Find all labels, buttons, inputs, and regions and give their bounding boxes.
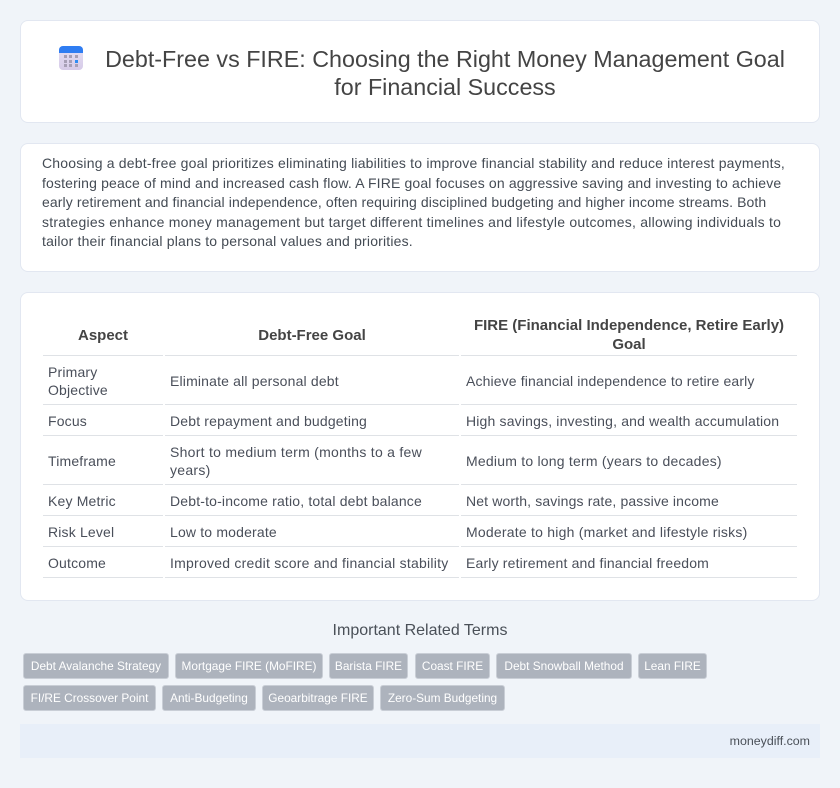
tag: Coast FIRE — [422, 659, 483, 673]
column header: FIRE goal: Goal — [612, 336, 646, 353]
row: Primary Objective — [48, 364, 108, 398]
cell: debt timeframe: years) — [170, 462, 211, 478]
row: Outcome: Outcome — [48, 555, 106, 571]
column header: Aspect: Aspect — [78, 327, 128, 344]
tag: Zero-Sum Budgeting — [388, 691, 497, 705]
related terms heading: Important Related Terms — [333, 622, 507, 639]
tag — [162, 685, 256, 711]
cell: FIRE outcome: Early retirement and financial freedom — [466, 555, 709, 571]
cell: debt outcome: Improved credit score and financial stability — [170, 555, 448, 571]
row: Focus: Focus — [48, 413, 87, 429]
title: for Financial Success — [334, 74, 556, 100]
related terms tags — [23, 653, 707, 711]
cell: debt metric: Debt-to-income ratio, total debt balance — [170, 493, 422, 509]
cell: FIRE timeframe: Medium to long term (years to decades) — [466, 453, 722, 469]
tag — [415, 653, 490, 679]
row: Risk Level: Risk Level — [48, 524, 114, 540]
tag: Barista FIRE — [335, 659, 402, 673]
cell: debt timeframe: Short to medium term (months to a few — [170, 444, 422, 460]
row: Key Metric: Key Metric — [48, 493, 116, 509]
cell: debt focus: Debt repayment and budgeting — [170, 413, 367, 429]
summary paragraph: fostering peace of mind and increased cash flow. A FIRE goal focuses on aggressive saving and investing to achieve — [42, 175, 781, 191]
row: Primary Objective: Primary — [48, 364, 97, 380]
column header: FIRE goal — [474, 317, 784, 353]
cell: debt objective: Eliminate all personal debt — [170, 373, 339, 389]
row: Primary Objective: Objective — [48, 382, 108, 398]
row: Timeframe: Timeframe — [48, 453, 116, 469]
tag — [380, 685, 505, 711]
tag: Anti-Budgeting — [170, 691, 248, 705]
summary paragraph: strategies enhance money management but target different timelines and lifestyle outcomes, allowing individuals to — [42, 214, 781, 230]
tag: Debt Avalanche Strategy — [31, 659, 161, 673]
tag — [262, 685, 374, 711]
cell: debt risk: Low to moderate — [170, 524, 277, 540]
cell: FIRE metric: Net worth, savings rate, passive income — [466, 493, 719, 509]
summary paragraph: tailor their financial plans to personal values and priorities. — [42, 233, 413, 249]
tag — [329, 653, 408, 679]
footer source text: moneydiff.com — [730, 734, 810, 748]
cell: FIRE focus: High savings, investing, and wealth accumulation — [466, 413, 779, 429]
tag — [175, 653, 323, 679]
icon: calendar — [59, 46, 83, 70]
tag: FI/RE Crossover Point — [31, 691, 148, 705]
tag — [23, 653, 169, 679]
cell: debt timeframe — [170, 444, 422, 478]
footer bar — [20, 724, 820, 758]
tag — [496, 653, 632, 679]
header panel — [20, 20, 820, 123]
tag: Geoarbitrage FIRE — [268, 691, 368, 705]
summary paragraph: Choosing a debt-free goal prioritizes eliminating liabilities to improve financial stability and reduce interest payments, — [42, 155, 785, 171]
panel: comparison table — [20, 292, 820, 601]
column header: Debt-Free Goal: Debt-Free Goal — [258, 327, 366, 344]
panel: summary text — [20, 143, 820, 272]
comparison table — [43, 317, 797, 578]
title — [105, 46, 785, 100]
cell: FIRE objective: Achieve financial independence to retire early — [466, 373, 754, 389]
tag — [23, 685, 156, 711]
summary paragraph: early retirement and financial independence, often requiring disciplined budgeting and higher income streams. Both — [42, 194, 766, 210]
tag — [638, 653, 707, 679]
tag: Mortgage FIRE (MoFIRE) — [182, 659, 316, 673]
cell: FIRE risk: Moderate to high (market and lifestyle risks) — [466, 524, 747, 540]
tag: Debt Snowball Method — [504, 659, 624, 673]
title: Debt-Free vs FIRE: Choosing the Right Money Management Goal — [105, 46, 785, 72]
column header: FIRE goal: FIRE (Financial Independence, Retire Early) — [474, 317, 784, 334]
summary paragraph — [42, 155, 785, 249]
tag: Lean FIRE — [644, 659, 701, 673]
